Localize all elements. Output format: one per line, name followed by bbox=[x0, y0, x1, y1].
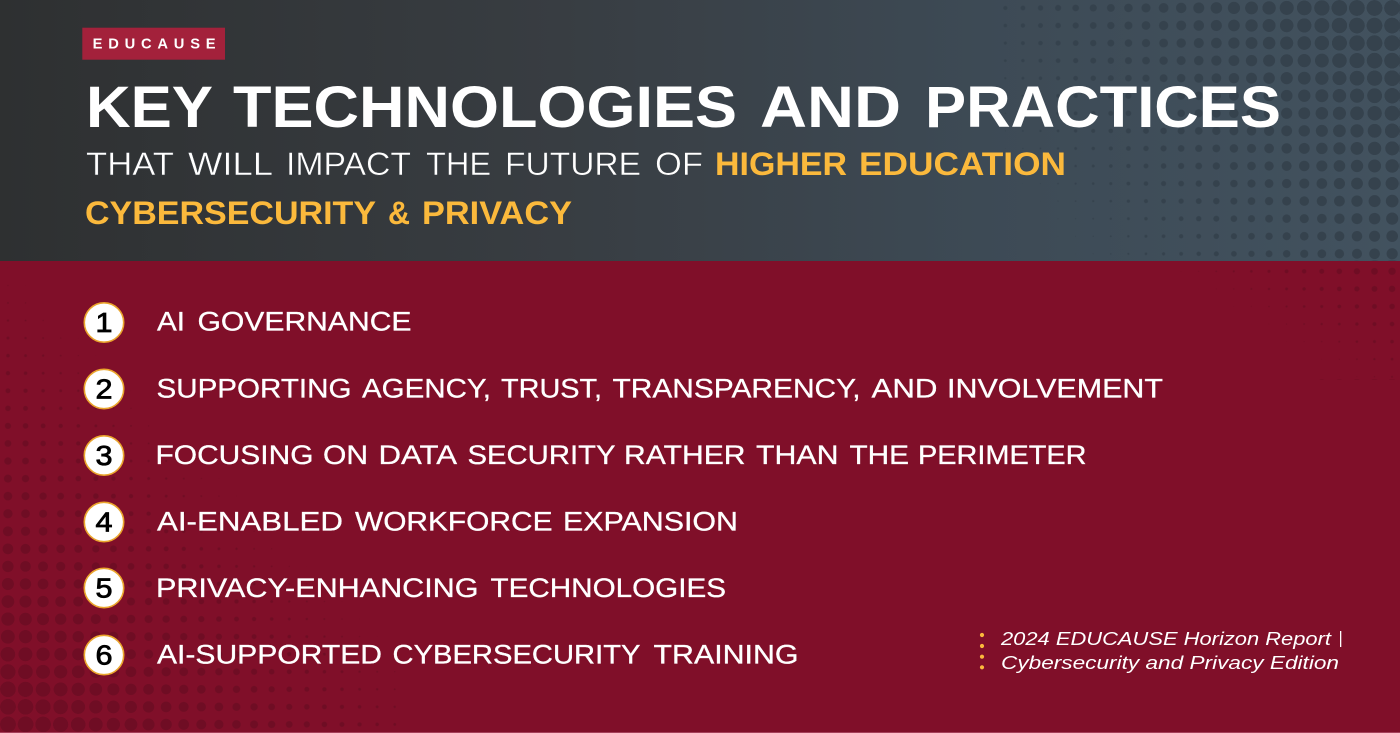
list item 3: PERIMETER bbox=[918, 440, 1086, 470]
subtitle: HIGHER bbox=[715, 146, 847, 182]
list item 1: GOVERNANCE bbox=[198, 307, 412, 337]
list item 3: ON bbox=[323, 440, 368, 470]
halftone dots: red panel bottom left bbox=[0, 285, 396, 732]
title: KEY bbox=[86, 75, 213, 140]
number badge 2 bbox=[84, 369, 124, 409]
list item 2: TRUST, bbox=[501, 374, 602, 404]
list item 4: EXPANSION bbox=[563, 507, 738, 537]
source note bbox=[980, 628, 1341, 673]
list item 6: CYBERSECURITY bbox=[392, 640, 641, 670]
number badge 1 bbox=[84, 303, 124, 342]
list item 3 bbox=[84, 436, 1087, 475]
panel: header band bbox=[0, 0, 1400, 261]
number badge 4: 4 bbox=[96, 506, 112, 538]
source note: 2024 EDUCAUSE Horizon Report bbox=[1000, 628, 1332, 649]
title: AND bbox=[760, 75, 901, 140]
list item 6: TRAINING bbox=[654, 640, 798, 670]
number badge 6 bbox=[84, 635, 124, 675]
list item 4: AI-ENABLED bbox=[157, 507, 343, 537]
list item 2: TRANSPARENCY, bbox=[612, 374, 860, 404]
subtitle: FUTURE bbox=[505, 146, 641, 182]
list item 2: AGENCY, bbox=[362, 374, 491, 404]
list item 3: THAN bbox=[756, 440, 838, 470]
edition heading: PRIVACY bbox=[422, 195, 572, 231]
halftone dots: red panel top right bbox=[1137, 263, 1400, 380]
list item 4: WORKFORCE bbox=[355, 507, 552, 537]
subtitle: THAT bbox=[86, 146, 174, 182]
edition heading: & bbox=[388, 195, 410, 231]
logo: EDUCAUSE: EDUCAUSE bbox=[93, 37, 216, 53]
number badge 1: 1 bbox=[96, 307, 112, 338]
source note: Cybersecurity and Privacy Edition bbox=[1001, 652, 1339, 673]
list item 6 bbox=[84, 635, 799, 675]
list item 2: SUPPORTING bbox=[156, 374, 352, 404]
list item 3: THE bbox=[850, 440, 909, 470]
logo: EDUCAUSE bbox=[82, 28, 225, 60]
list item 1: AI bbox=[157, 307, 185, 337]
list item 3: SECURITY bbox=[468, 440, 616, 470]
list item 5: TECHNOLOGIES bbox=[490, 573, 726, 603]
list item 2 bbox=[84, 369, 1163, 409]
list item 5: PRIVACY-ENHANCING bbox=[156, 573, 478, 603]
list item 4 bbox=[84, 502, 738, 542]
number badge 3: 3 bbox=[96, 440, 112, 471]
number badge 4 bbox=[84, 502, 124, 542]
subtitle bbox=[86, 146, 1066, 182]
title: TECHNOLOGIES bbox=[233, 75, 737, 140]
list item 1 bbox=[84, 303, 412, 342]
list item 3: RATHER bbox=[624, 440, 746, 470]
title: PRACTICES bbox=[925, 75, 1281, 140]
number badge 5: 5 bbox=[96, 572, 112, 604]
icon: gold dotted divider bbox=[980, 633, 984, 669]
subtitle: THE bbox=[426, 146, 491, 182]
subtitle: IMPACT bbox=[286, 146, 411, 182]
number badge 2: 2 bbox=[96, 374, 112, 404]
number badge 6: 6 bbox=[96, 640, 112, 670]
subtitle: EDUCATION bbox=[859, 146, 1066, 182]
list item 2: AND bbox=[872, 374, 938, 404]
number badge 5 bbox=[84, 568, 124, 608]
title bbox=[86, 75, 1281, 140]
list item 6: AI-SUPPORTED bbox=[157, 640, 382, 670]
subtitle: WILL bbox=[188, 146, 273, 182]
edition heading: CYBERSECURITY bbox=[85, 195, 376, 231]
halftone dots: header right bbox=[997, 0, 1400, 261]
number badge 3 bbox=[84, 436, 124, 475]
subtitle: OF bbox=[655, 146, 703, 182]
list item 2: INVOLVEMENT bbox=[947, 374, 1163, 404]
list item 3: DATA bbox=[378, 440, 457, 470]
list item 3: FOCUSING bbox=[156, 440, 314, 470]
list item 5 bbox=[84, 568, 726, 608]
edition heading bbox=[85, 195, 572, 231]
